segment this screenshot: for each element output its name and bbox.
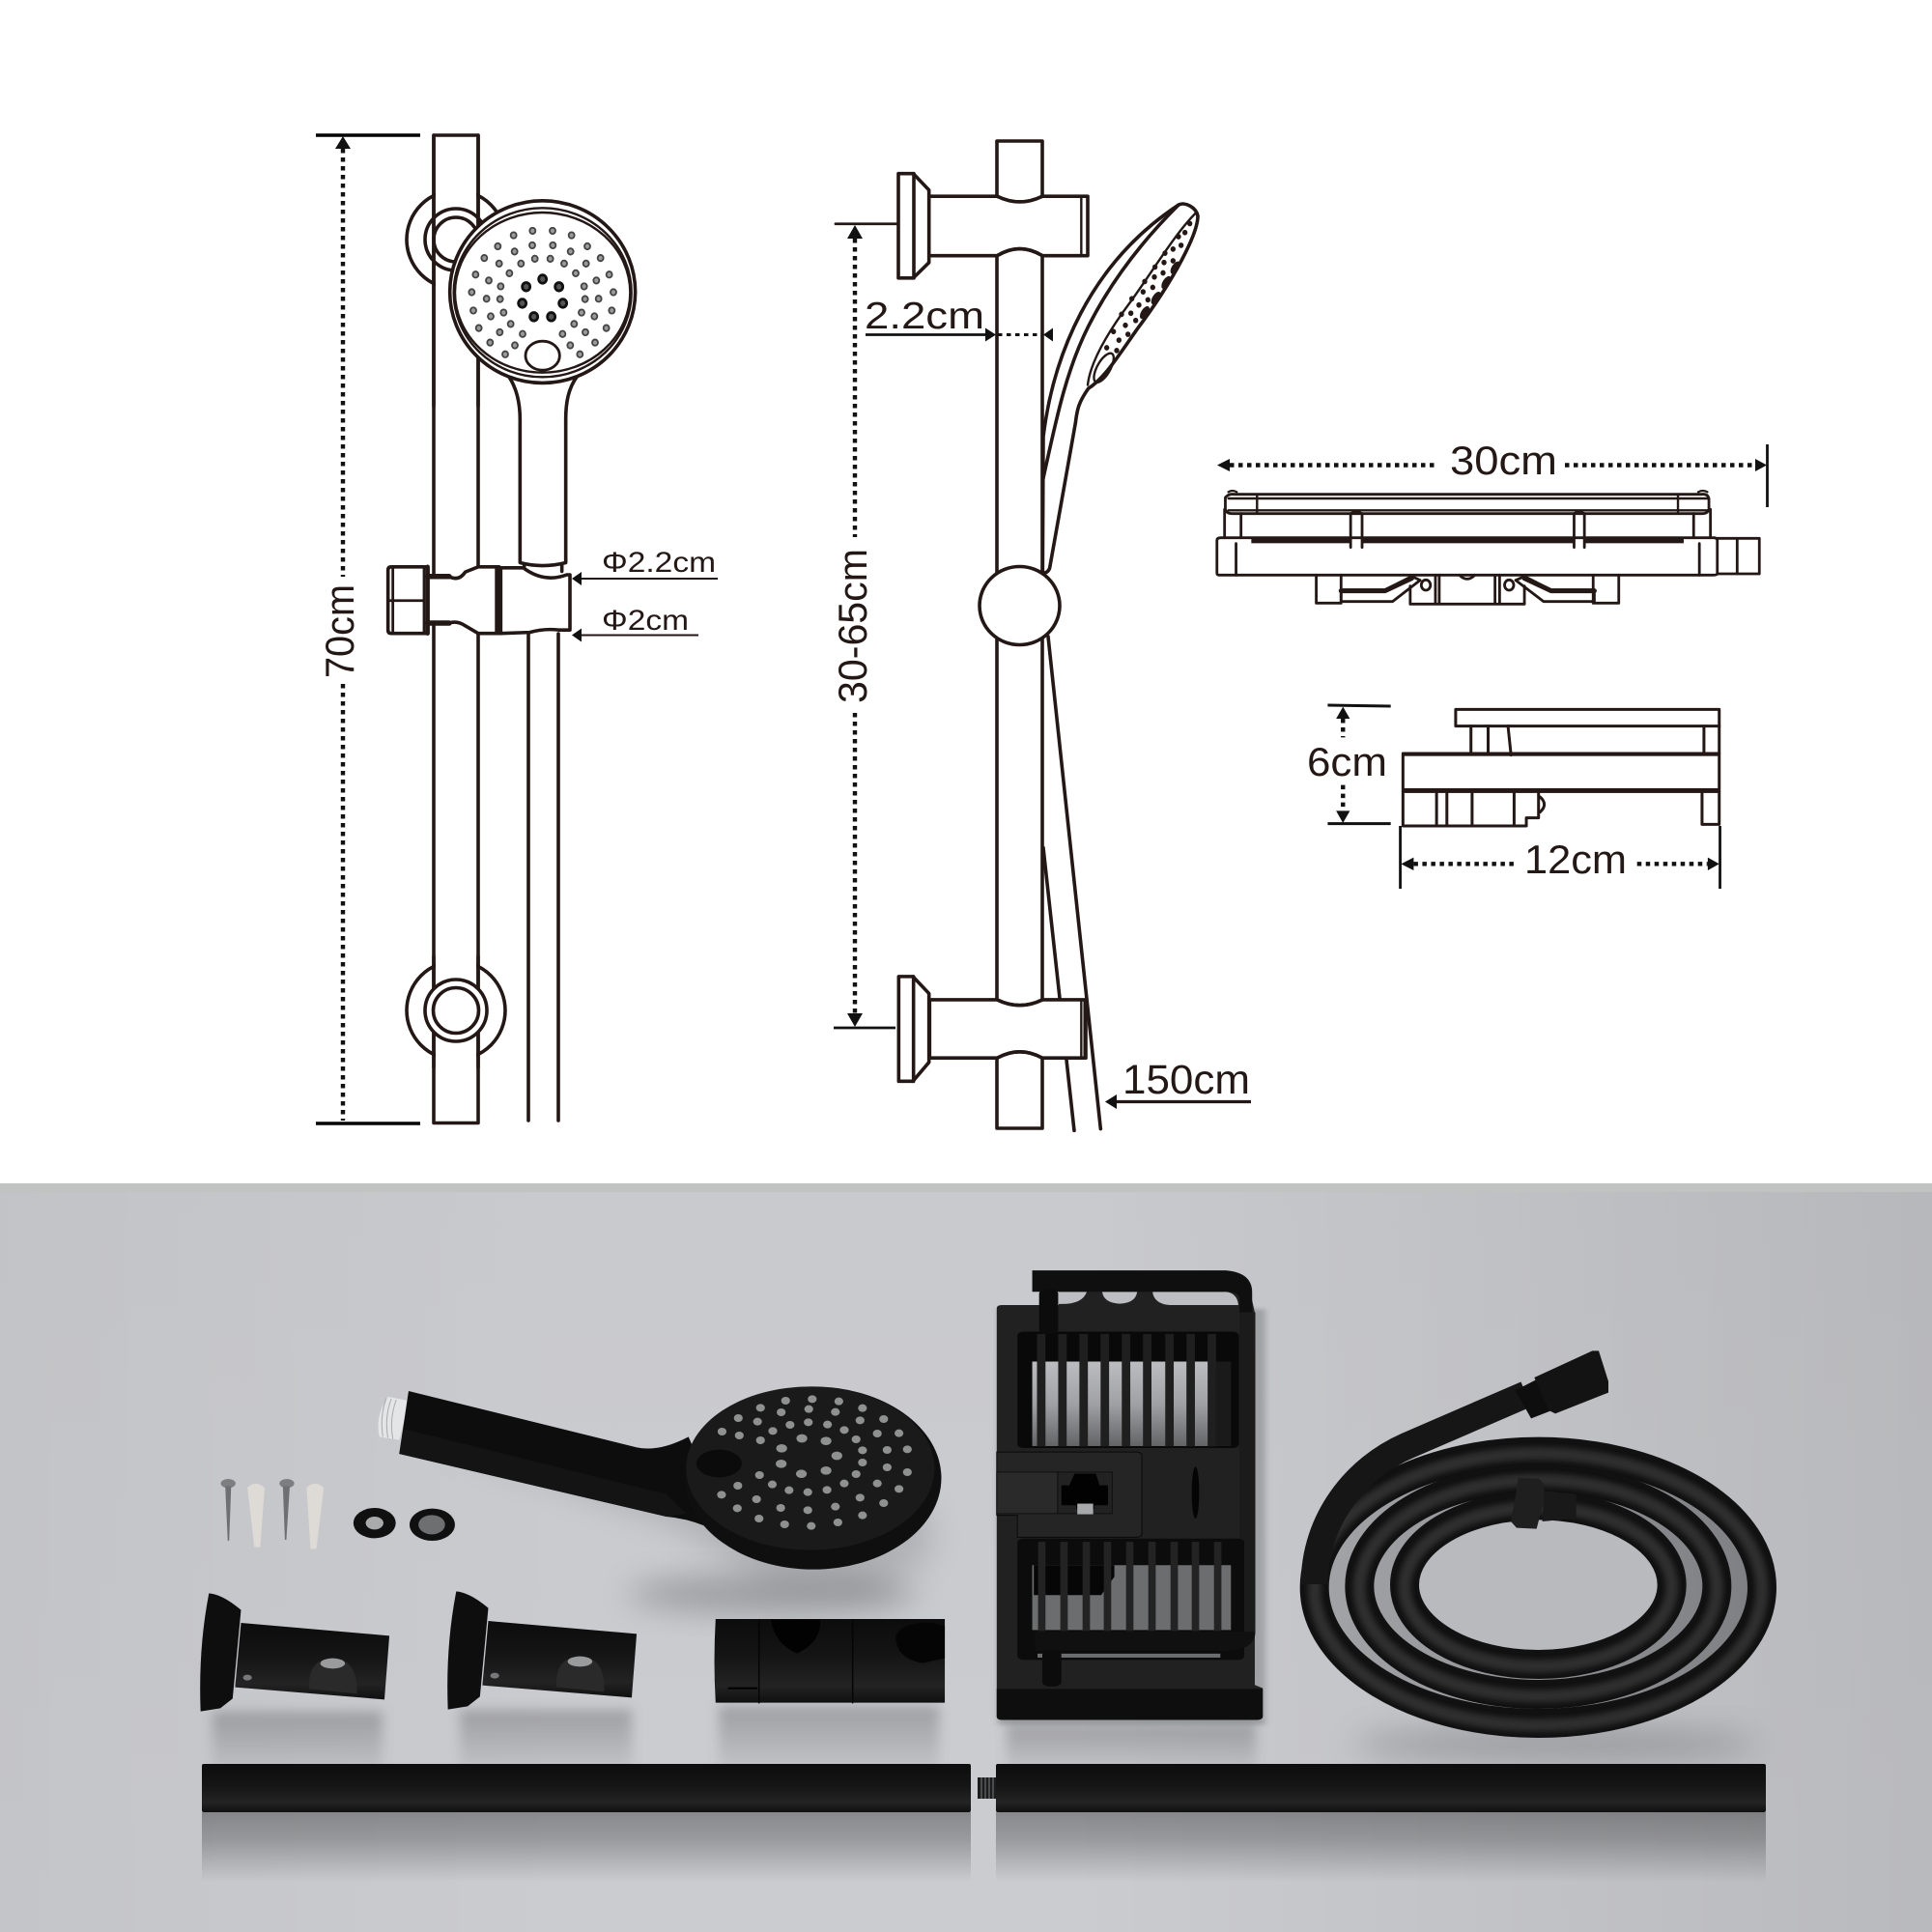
- dimension: 70cm height: 70cm: [317, 584, 362, 678]
- conical hose end: [1534, 1350, 1608, 1413]
- dimension: 70cm height: [316, 135, 420, 1123]
- wall bracket 1 photo: [200, 1593, 389, 1712]
- dimension: 2.2cm rail diameter: [865, 296, 1053, 342]
- handle: [399, 1391, 735, 1546]
- photo background: [0, 1183, 1932, 1932]
- shelf bottom edge: [997, 1689, 1263, 1719]
- wall plug 2: [306, 1484, 324, 1548]
- spray nozzles: [469, 228, 616, 357]
- panel: side view diagram: [830, 141, 1251, 1130]
- panel: shelf top view diagram: [1217, 438, 1768, 604]
- mode button: [696, 1450, 742, 1477]
- center mount hole: [1062, 1474, 1108, 1509]
- shower head: [685, 1386, 941, 1570]
- shelf outline, side: [1403, 709, 1719, 826]
- panel: product parts photo: [0, 1183, 1932, 1932]
- screw 2: [279, 1479, 295, 1540]
- wall plug 1: [247, 1484, 265, 1548]
- hand shower photo: [378, 1386, 941, 1570]
- upper basket opening: [1017, 1332, 1239, 1448]
- inner hose tube end: [1543, 1491, 1577, 1521]
- outer loop: [1315, 1452, 1762, 1723]
- shelf base plate: [997, 1289, 1263, 1719]
- rubber washers: [354, 1508, 455, 1541]
- upper wall bracket: [407, 135, 505, 406]
- top cutouts: [1059, 1292, 1238, 1305]
- mode button: [526, 341, 559, 370]
- lower rail: [1035, 1632, 1256, 1651]
- nozzles, side view: [1104, 221, 1192, 354]
- rail section left: [202, 1764, 971, 1812]
- label: 12cm: 12cm: [1524, 837, 1627, 882]
- upper bracket, side view: [836, 174, 1088, 278]
- top rail: [1033, 1270, 1252, 1314]
- coiled hose photo: [1315, 1350, 1762, 1725]
- slide rail: [434, 135, 478, 1122]
- shadowed gaps between coils: [1315, 1452, 1762, 1723]
- lower wall bracket: [407, 952, 505, 1069]
- center opening: [1405, 1505, 1672, 1664]
- slider ball: [980, 566, 1060, 645]
- threaded rail joint: [978, 1777, 997, 1799]
- middle loop: [1359, 1478, 1717, 1694]
- hand shower, front view: [388, 201, 636, 634]
- soft shadows: [202, 1439, 1766, 1882]
- rail section right: [996, 1764, 1766, 1812]
- hose, front view: [528, 634, 558, 1121]
- dimension: 30-65cm mounting distance: [830, 225, 895, 1028]
- slide clamp photo: [715, 1619, 945, 1703]
- center mount plate: [997, 1452, 1142, 1537]
- inner loop: [1405, 1505, 1672, 1664]
- label: 6cm: 6cm: [1307, 739, 1387, 784]
- spray nozzles: [717, 1395, 912, 1530]
- handle: [509, 377, 577, 566]
- wall bracket 2 photo: [447, 1591, 637, 1710]
- dimension: 12cm depth: [1401, 826, 1720, 889]
- dimension labels: hose and handle diameter: [572, 547, 718, 641]
- screws and wall plugs: [221, 1479, 324, 1548]
- shelf outline, front: [1217, 491, 1759, 604]
- shelf photo: [997, 1270, 1265, 1725]
- handle end collar: [525, 564, 562, 571]
- hose nut: [1511, 1478, 1544, 1529]
- panel: shelf side view diagram: [1307, 705, 1720, 889]
- hand shower, side view: [1042, 204, 1198, 573]
- side view rail: [997, 141, 1042, 1128]
- head outline: [450, 201, 636, 383]
- panel: front view diagram: [316, 135, 718, 1123]
- matte highlights on coils: [1315, 1454, 1762, 1725]
- dimension: 30cm width: [1217, 438, 1768, 507]
- center nozzles: [519, 275, 567, 321]
- hoses, side view: [1043, 637, 1100, 1130]
- side rail: [1239, 1313, 1256, 1632]
- screw 1: [221, 1479, 236, 1541]
- shelf shadow edge: [998, 1309, 1265, 1725]
- mount slit: [1192, 1466, 1199, 1519]
- dimension: 30-65cm mounting distance: 30-65cm: [830, 549, 875, 703]
- filter washer: [410, 1509, 455, 1541]
- hose collar: [1516, 1379, 1550, 1418]
- rail posts: [1039, 1289, 1058, 1334]
- dimension labels: hose and handle diameter: Φ2.2cm: [602, 547, 716, 579]
- slide clamp: [388, 567, 570, 634]
- dimension: 30cm width: 30cm: [1450, 438, 1557, 483]
- lower bracket, side view: [898, 977, 1086, 1081]
- hose tail: [1315, 1394, 1526, 1584]
- dimension labels: hose and handle diameter: Φ2cm: [602, 605, 689, 637]
- lower basket opening: [1017, 1539, 1244, 1660]
- dimension: 2.2cm rail diameter: 2.2cm: [865, 296, 984, 337]
- dimension: 6cm height: [1327, 705, 1391, 824]
- dimension: 150cm hose length: 150cm: [1122, 1057, 1250, 1103]
- threaded connector: [378, 1397, 409, 1440]
